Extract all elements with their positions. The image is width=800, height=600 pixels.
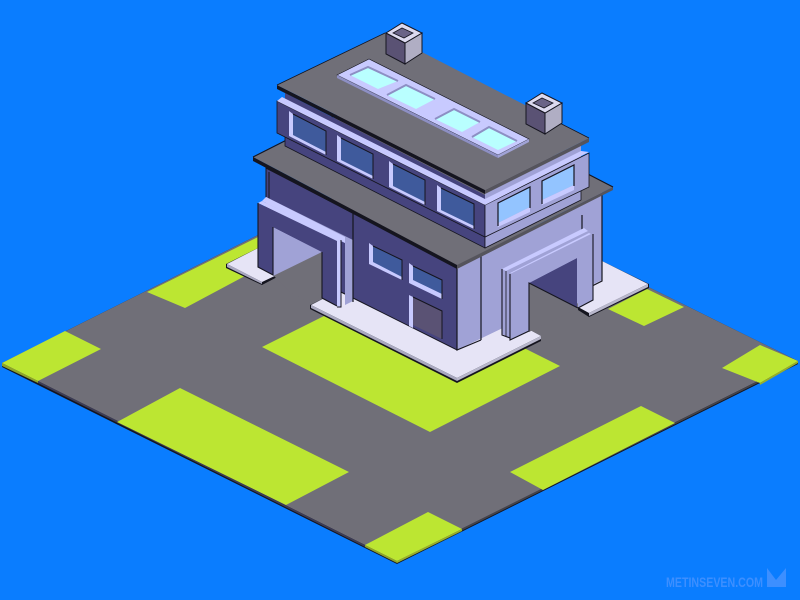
window band: left face	[277, 97, 485, 237]
door	[409, 295, 442, 339]
upper window 4	[437, 185, 474, 229]
lower storey: left wall	[266, 168, 457, 350]
right arch: recess wall	[529, 258, 577, 308]
platform: right	[578, 261, 649, 317]
upper window 3	[389, 161, 425, 205]
side window 1	[498, 187, 530, 227]
lawn: lower right	[510, 406, 675, 490]
platform: main	[310, 290, 541, 383]
watermark logo	[767, 568, 786, 587]
lawn: top left	[147, 236, 290, 308]
right arch: ground under opening	[529, 283, 578, 332]
right arch: front face	[510, 233, 593, 340]
skylight pane 2	[387, 85, 435, 109]
upper window 1	[289, 111, 326, 155]
watermark	[666, 568, 786, 590]
ground plate with road surface	[2, 164, 798, 564]
right arch: back layer	[502, 228, 588, 338]
chimney 2	[526, 93, 562, 134]
lawn patches	[2, 236, 798, 563]
lawn: top right	[608, 289, 684, 326]
left arch: back layer	[262, 197, 353, 305]
skylight frame	[337, 59, 529, 158]
lower window right	[409, 263, 442, 299]
left arch: recess wall	[273, 227, 322, 276]
upper roof slab	[277, 33, 589, 194]
skylight pane 3	[435, 109, 480, 132]
lawn: large left	[117, 388, 349, 505]
platform: left	[226, 246, 300, 285]
chimney 1	[386, 23, 422, 64]
building	[253, 23, 613, 350]
left arch: ground under opening	[273, 252, 322, 304]
lower window left	[369, 243, 402, 280]
wall step line	[480, 254, 482, 340]
lawn: left corner	[2, 331, 101, 383]
side window 2	[542, 165, 574, 205]
lawn: right corner	[722, 345, 798, 385]
upper storey: base lip	[285, 135, 581, 248]
watermark text: METINSEVEN.COM	[666, 575, 763, 590]
skylight pane 4	[472, 127, 517, 150]
skylight pane 1	[350, 67, 398, 89]
lower roof slab	[253, 82, 613, 269]
upper window 2	[337, 135, 373, 179]
upper storey: inset wall under roof	[285, 93, 581, 210]
window band: right face	[485, 151, 589, 237]
lower storey: right wall	[457, 192, 602, 350]
left arch: front face	[258, 201, 341, 308]
lawn: centre	[262, 305, 560, 432]
lawn: bottom corner	[365, 512, 462, 563]
